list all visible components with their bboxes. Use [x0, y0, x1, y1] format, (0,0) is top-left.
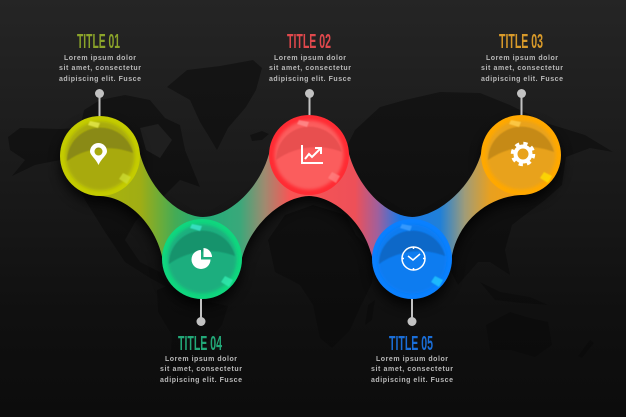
connector pin 2	[305, 89, 314, 118]
sphere 3	[481, 115, 561, 195]
label: title 01	[59, 31, 141, 83]
connector pin 1	[95, 89, 104, 118]
label: title 02: sit amet, consectetur	[269, 65, 351, 72]
connector pin 4	[196, 298, 206, 326]
label: title 03: Lorem ipsum dolor	[486, 55, 558, 62]
label: title 03: TITLE 03	[499, 31, 543, 53]
map: north america	[8, 95, 200, 290]
label: title 05: TITLE 05	[389, 333, 433, 355]
label: title 05: sit amet, consectetur	[371, 366, 453, 373]
connector pin 5	[408, 298, 416, 326]
map: indonesia	[480, 282, 548, 305]
hudson bay	[140, 124, 172, 158]
label: title 01: Lorem ipsum dolor	[64, 55, 136, 62]
label: title 02	[269, 31, 351, 83]
label: title 01: TITLE 01	[77, 31, 120, 53]
icon: gear	[512, 144, 534, 164]
label: title 02: Lorem ipsum dolor	[274, 55, 346, 62]
map: australia	[486, 312, 552, 357]
icon: line chart	[302, 145, 323, 163]
step 3 node	[481, 89, 561, 195]
icon: pie chart	[192, 248, 212, 269]
sphere 1	[60, 116, 140, 196]
label: title 02: adipiscing elit. Fusce	[269, 76, 351, 83]
label: title 01: sit amet, consectetur	[59, 65, 141, 72]
map: madagascar	[365, 300, 375, 325]
sphere 4	[162, 219, 242, 299]
label: title 03	[481, 31, 563, 83]
label: title 04: Lorem ipsum dolor	[165, 356, 237, 363]
label: title 04	[160, 333, 242, 384]
sphere 2	[269, 115, 349, 195]
label: title 02: TITLE 02	[287, 31, 331, 53]
label: title 01: adipiscing elit. Fusce	[59, 76, 141, 83]
step 2 node	[269, 89, 349, 195]
label: title 04: TITLE 04	[178, 333, 222, 355]
label: title 05: adipiscing elit. Fusce	[371, 377, 453, 384]
label: title 05: Lorem ipsum dolor	[376, 356, 448, 363]
step 4 node	[162, 219, 242, 326]
map: africa	[268, 205, 376, 348]
label: title 05	[371, 333, 453, 384]
world map	[8, 60, 613, 385]
map: eurasia	[340, 92, 613, 285]
step 1 node	[60, 89, 140, 196]
sphere 5	[372, 219, 452, 299]
map: south america	[157, 283, 228, 385]
icon: clock	[402, 247, 425, 270]
icon: map pin	[90, 143, 107, 165]
connector pin 3	[517, 89, 526, 118]
map: greenland	[167, 60, 262, 150]
band shadow	[60, 122, 561, 306]
label: title 04: sit amet, consectetur	[160, 366, 242, 373]
label: title 03: sit amet, consectetur	[481, 65, 563, 72]
label: title 03: adipiscing elit. Fusce	[481, 76, 563, 83]
map: new zealand	[578, 340, 594, 358]
connecting band	[100, 150, 521, 262]
map: iceland	[250, 131, 269, 141]
step 5 node	[372, 219, 452, 326]
label: title 04: adipiscing elit. Fusce	[160, 377, 242, 384]
